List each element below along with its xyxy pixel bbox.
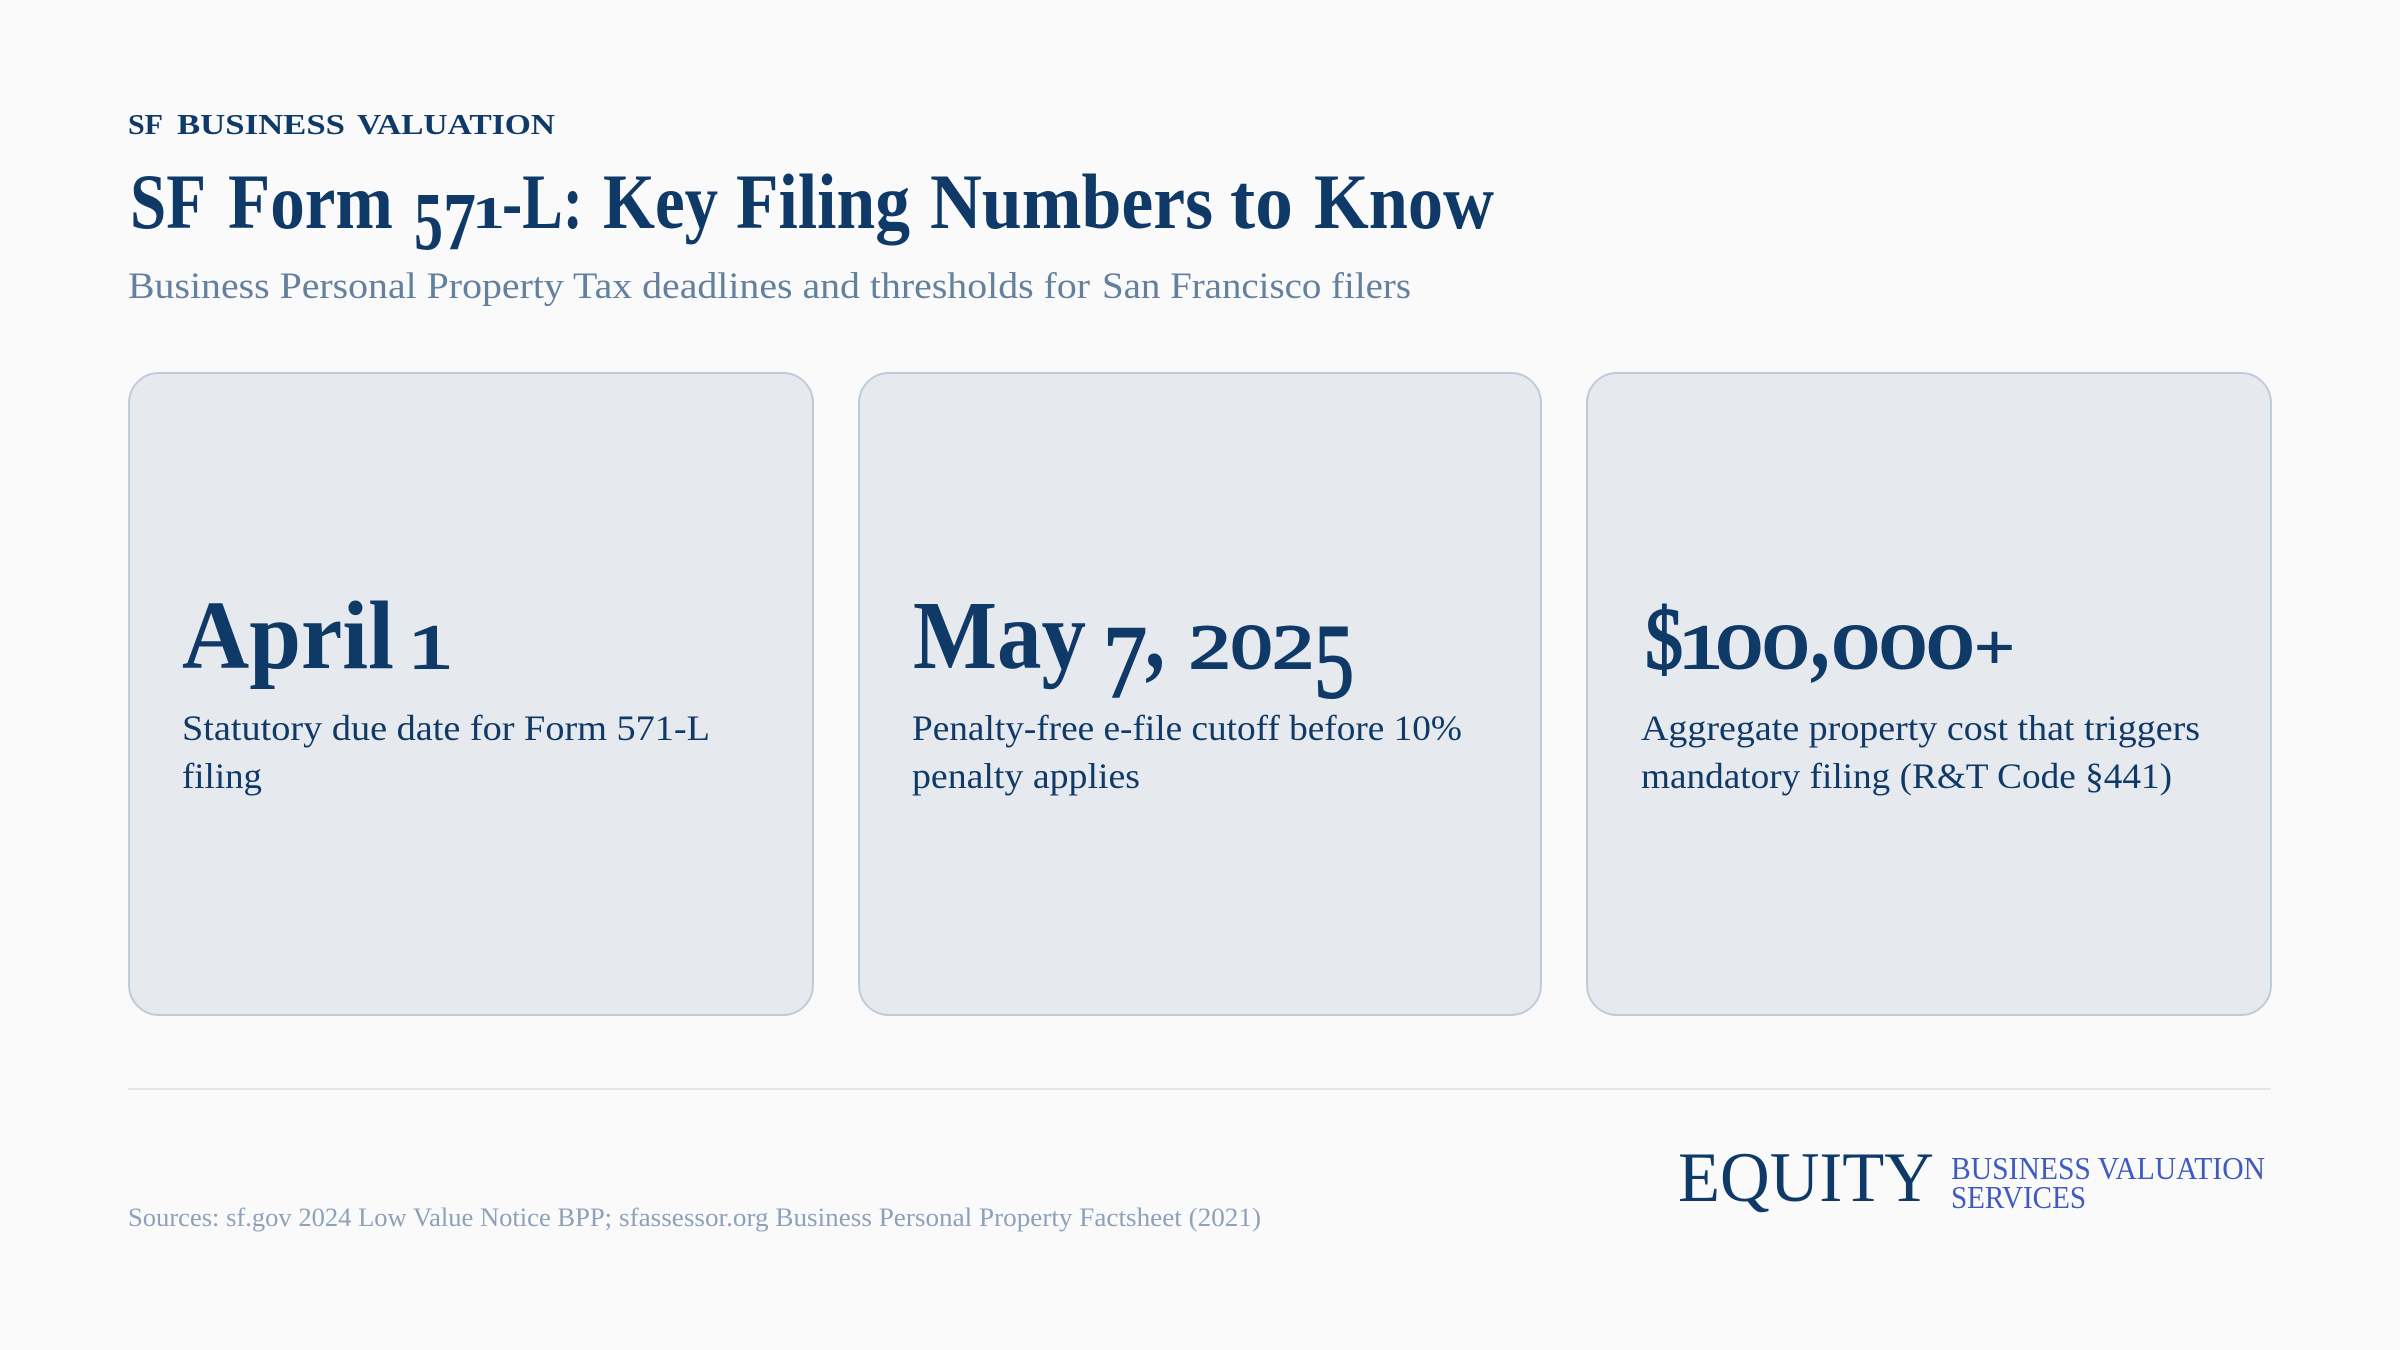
logo tagline — [1951, 1150, 2265, 1215]
description: threshold — [1641, 708, 2200, 796]
subtitle: San Francisco filers — [1102, 266, 1411, 307]
title — [130, 158, 1494, 267]
eyebrow heading: SF — [128, 109, 163, 141]
logo wordmark: EQUITY — [1678, 1139, 1934, 1217]
title: to — [1230, 158, 1293, 245]
title: Form — [228, 158, 393, 245]
logo: Equity Business Valuation Services — [1678, 1139, 2265, 1217]
title: Key — [603, 158, 718, 245]
description: cutoff: Penalty-free e-file cutoff before 10% — [912, 708, 1462, 748]
stat: May 7, 2025: , — [1145, 582, 1165, 690]
description: due date: Statutory due date for Form 571-L — [182, 708, 710, 748]
description: threshold: mandatory filing (R&T Code §441) — [1641, 756, 2172, 796]
stat: May 7, 2025: 5 — [1314, 603, 1354, 720]
title: 7 — [443, 175, 476, 267]
title: Know — [1314, 158, 1494, 245]
panel: May 7, 2025 e-file cutoff — [859, 373, 1541, 1015]
title: -L: — [502, 158, 583, 245]
title: 5 — [414, 175, 443, 267]
title: Filing — [736, 158, 910, 245]
eyebrow heading — [128, 109, 555, 141]
panel: $100,000+ threshold — [1587, 373, 2271, 1015]
description: due date — [182, 708, 710, 796]
stat: May 7, 2025: 7 — [1103, 605, 1147, 720]
eyebrow heading: BUSINESS — [177, 109, 345, 141]
stat: $100,000+ — [1645, 582, 2014, 690]
title: SF — [130, 158, 206, 245]
description: cutoff: penalty applies — [912, 756, 1140, 796]
stat: $100,000+: 1 — [1678, 614, 1723, 682]
stat: $100,000+: + — [1975, 614, 2014, 682]
stat: $100,000+: 00 — [1716, 614, 1809, 682]
description: cutoff — [912, 708, 1462, 796]
stat: $100,000+: 000 — [1832, 614, 1974, 682]
stat: May 7, 2025 — [913, 582, 1354, 720]
description: threshold: Aggregate property cost that triggers — [1641, 708, 2200, 748]
stat: April 1: 1 — [408, 614, 453, 682]
subtitle: Business Personal Property Tax deadlines and thresholds for — [128, 266, 1090, 307]
sources footnote: Sources: sf.gov 2024 Low Value Notice BPP; — [128, 1203, 612, 1232]
stat: April 1: April — [182, 582, 394, 690]
subtitle — [128, 266, 1411, 307]
stat: $100,000+: , — [1810, 582, 1830, 690]
title: 1 — [472, 187, 505, 238]
sources footnote — [128, 1203, 1261, 1232]
logo tagline: BUSINESS VALUATION — [1951, 1150, 2265, 1186]
title: Numbers — [930, 158, 1213, 245]
logo tagline: SERVICES — [1951, 1179, 2086, 1215]
eyebrow heading: VALUATION — [357, 109, 555, 141]
panel: April 1 statutory due date — [129, 373, 813, 1015]
sources footnote: sfassessor.org Business Personal Property Factsheet (2021) — [619, 1203, 1261, 1232]
stat: $100,000+: $ — [1645, 591, 1683, 688]
stat: May 7, 2025: 202 — [1189, 614, 1314, 682]
description: due date: filing — [182, 756, 262, 796]
stat: May 7, 2025: May — [913, 582, 1086, 690]
